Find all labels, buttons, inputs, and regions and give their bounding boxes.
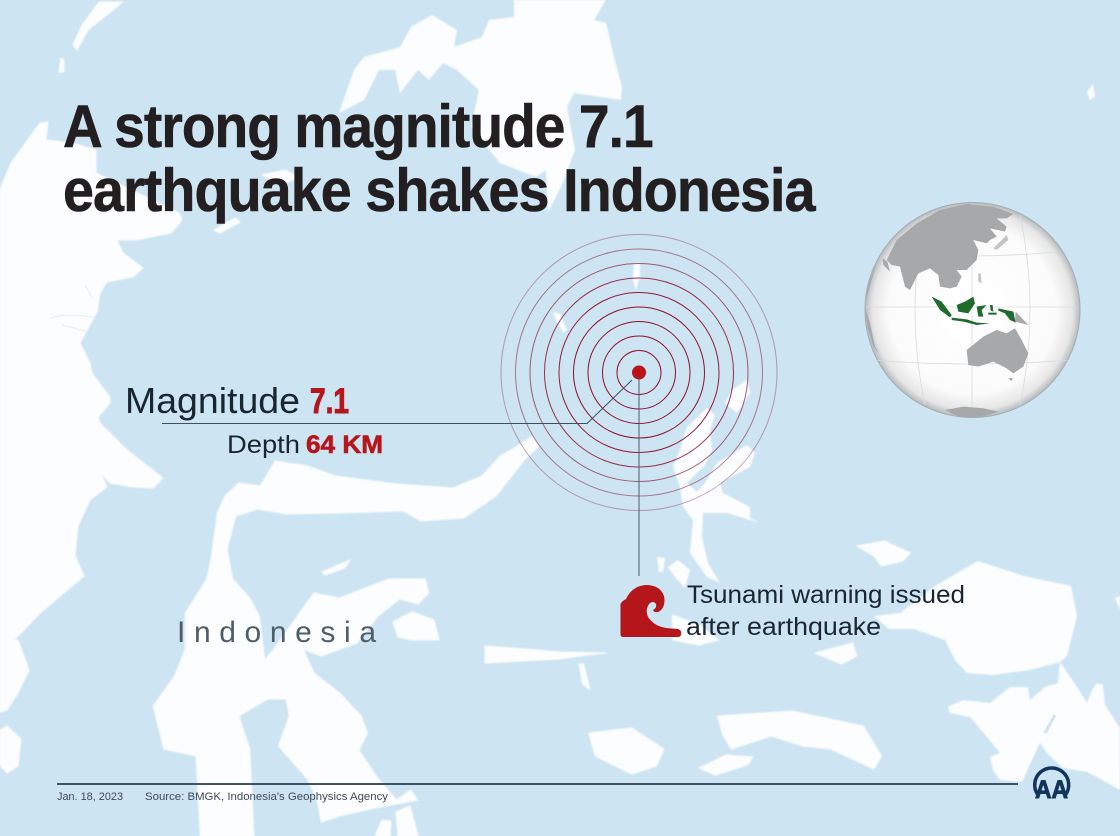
title: A strong magnitude 7.1 <box>63 94 653 161</box>
earthquake rings <box>501 234 777 510</box>
globe locator <box>865 202 1080 418</box>
footer rule <box>57 783 1018 785</box>
depth label <box>227 431 383 459</box>
title <box>63 94 816 224</box>
magnitude label: 7.1 <box>310 382 349 421</box>
map: Sulawesi <box>153 436 539 836</box>
depth label: 64 KM <box>306 431 383 459</box>
tsunami warning text <box>686 581 965 641</box>
map: Halmahera and nearby islands <box>553 84 1120 610</box>
tsunami warning text: after earthquake <box>686 613 881 641</box>
magnitude label: Magnitude <box>125 380 300 421</box>
map: coastal inlets <box>50 285 1055 733</box>
map: western landmasses <box>0 2 606 836</box>
globe land masses <box>865 204 1028 417</box>
logo: AA: AA <box>1035 776 1068 804</box>
icon: tsunami wave <box>620 585 681 637</box>
map label: Indonesia: Indonesia <box>177 616 376 649</box>
leader line to tsunami warning <box>638 378 640 576</box>
map: Mindanao <box>339 0 622 212</box>
depth label: Depth <box>227 431 300 459</box>
footer source: Source: BMGK, Indonesia's Geophysics Agency <box>145 791 389 803</box>
globe: Indonesia highlighted <box>932 297 1016 325</box>
footer date: Jan. 18, 2023 <box>57 791 123 803</box>
epicentre dot <box>632 366 646 380</box>
tsunami warning text: Tsunami warning issued <box>687 581 965 609</box>
map: eastern islands <box>579 541 910 775</box>
map: New Guinea <box>874 561 1120 790</box>
title: earthquake shakes Indonesia <box>63 158 816 224</box>
globe grid lines <box>866 203 1079 417</box>
leader line to magnitude label <box>162 380 632 424</box>
